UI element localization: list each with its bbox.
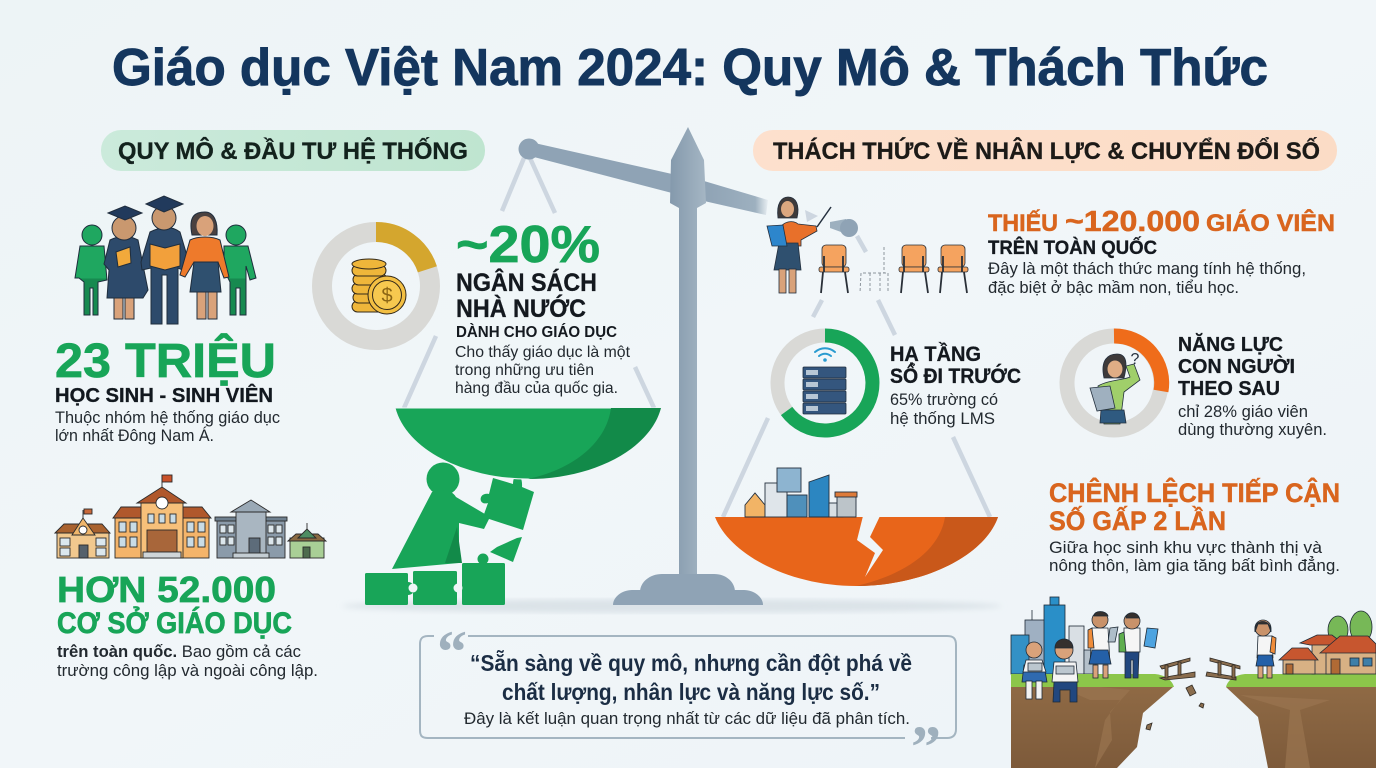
stat: 23 million students: Thuộc nhóm hệ thống giáo dục <box>55 408 280 427</box>
stat: digital gap: SỐ GẤP 2 LẦN <box>1049 504 1226 536</box>
left cliff <box>1011 687 1173 768</box>
stat: digital gap <box>1049 477 1340 575</box>
green student left <box>75 225 107 315</box>
stat: 20% of state budget: DÀNH CHO GIÁO DỤC <box>456 322 617 341</box>
stat: 20% of state budget <box>455 216 631 397</box>
quote box: “Sẵn sàng về quy mô, nhưng cần đột phá về <box>470 649 912 676</box>
stat: teacher shortage: GIÁO VIÊN <box>1206 209 1335 237</box>
icon: city on pan <box>745 468 857 517</box>
quote box <box>420 619 956 768</box>
village houses and trees <box>1279 611 1376 674</box>
seated students <box>1022 639 1078 702</box>
stat: teacher shortage: THIẾU <box>988 209 1058 237</box>
icon: opening quote: “ <box>437 619 467 685</box>
main school <box>113 475 211 558</box>
icon: school buildings <box>55 475 326 558</box>
right cliff <box>1226 687 1376 768</box>
stat: 52,000 institutions: trường công lập và ngoài công lập. <box>57 661 318 680</box>
quote box: chất lượng, nhân lực và năng lực số.” <box>502 679 880 705</box>
stat: 20% of state budget: trong những ưu tiên <box>455 362 594 379</box>
standing students <box>1088 612 1276 678</box>
stat: digital gap: Giữa học sinh khu vực thành thị và <box>1049 539 1323 557</box>
stat: 52,000 institutions <box>57 569 318 680</box>
icon: students and graduates <box>75 196 256 324</box>
stat: digital gap: CHÊNH LỆCH TIẾP CẬN <box>1049 477 1340 508</box>
heading pill: challenges: THÁCH THỨC VỀ NHÂN LỰC & CHUYỂN ĐỔI SỐ <box>773 137 1320 165</box>
male graduate with book <box>141 196 190 324</box>
icon: confused teacher with tablet: ? <box>1131 351 1140 368</box>
stat: 23 million students <box>55 333 280 445</box>
stat: teacher shortage <box>988 206 1335 297</box>
stat: digital gap: nông thôn, làm gia tăng bất bình đẳng. <box>1049 556 1340 575</box>
donut chart: 28% teachers <box>1067 336 1162 430</box>
stat: infrastructure first: hệ thống LMS <box>890 410 995 428</box>
green school <box>288 523 326 558</box>
stat: 20% of state budget: Cho thấy giáo dục là một <box>455 344 631 361</box>
icon: person lifting puzzle pieces <box>365 462 534 605</box>
stat: infrastructure first: 65% trường có <box>890 391 998 409</box>
broken bridge <box>1146 658 1240 730</box>
stat: 20% of state budget: NGÂN SÁCH <box>456 267 597 297</box>
stat: teacher shortage: TRÊN TOÀN QUỐC <box>988 237 1157 259</box>
icon: stack of coins <box>352 259 406 314</box>
stat: 52,000 institutions: CƠ SỞ GIÁO DỤC <box>57 606 292 640</box>
stat: infrastructure first: SỔ ĐI TRƯỚC <box>890 364 1021 388</box>
donut chart: 20% budget <box>322 232 430 340</box>
stat: 23 million students: lớn nhất Đông Nam Á. <box>55 426 214 445</box>
donut chart: 65% LMS <box>778 336 872 430</box>
stat: human capacity: THEO SAU <box>1178 378 1280 400</box>
female student in orange <box>180 212 229 319</box>
icon: teacher with pointer <box>767 197 831 293</box>
icon: confused teacher with tablet <box>1090 351 1140 424</box>
stat: human capacity: NĂNG LỰC <box>1178 333 1283 356</box>
city buildings <box>1011 597 1096 674</box>
grey school <box>215 500 287 558</box>
orange scale pan with crack <box>715 516 998 586</box>
stat: 20% of state budget: hàng đầu của quốc gia. <box>455 380 618 397</box>
stat: human capacity: CON NGƯỜI <box>1178 354 1295 378</box>
stat: 23 million students: HỌC SINH - SINH VIÊN <box>55 383 273 407</box>
female graduate <box>104 206 148 319</box>
icon: server with wifi <box>803 348 846 414</box>
quote box: Đây là kết luận quan trọng nhất từ các dữ liệu đã phân tích. <box>464 710 910 728</box>
stat: infrastructure first: HẠ TẦNG <box>890 343 981 366</box>
stat: 20% of state budget: ~20% <box>456 216 600 274</box>
stat: 52,000 institutions: HƠN 52.000 <box>57 569 276 610</box>
stat: human capacity: chỉ 28% giáo viên <box>1178 403 1308 421</box>
icon: stack of coins: $ <box>381 285 393 307</box>
title: Giáo dục Việt Nam 2024: Quy Mô & Thách Thức <box>112 39 1268 97</box>
heading pill: scale and investment: QUY MÔ & ĐẦU TƯ HỆ THỐNG <box>118 137 468 165</box>
falling rocks <box>1186 685 1196 696</box>
stat: infrastructure first <box>890 343 1021 428</box>
stat: teacher shortage: đặc biệt ở bậc mầm non, tiểu học. <box>988 279 1239 297</box>
stat: 20% of state budget: NHÀ NƯỚC <box>456 293 586 323</box>
stat: human capacity <box>1178 333 1327 439</box>
illustration: urban-rural divide with broken bridge <box>1011 597 1376 768</box>
stat: teacher shortage: Đây là một thách thức mang tính hệ thống, <box>988 260 1306 278</box>
green scale pan <box>395 408 661 479</box>
stat: teacher shortage: ~120.000 <box>1065 206 1200 238</box>
icon: row of chairs with a missing chair <box>819 245 968 293</box>
green student right <box>224 225 256 315</box>
heading pill: challenges <box>753 130 1337 171</box>
heading pill: scale and investment <box>101 130 485 171</box>
balance scale <box>342 127 1002 613</box>
small school <box>55 509 110 558</box>
stat: 52,000 institutions: trên toàn quốc. Bao gồm cả các <box>57 642 301 661</box>
stat: 23 million students: 23 TRIỆU <box>55 333 276 388</box>
stat: human capacity: dùng thường xuyên. <box>1178 421 1327 439</box>
